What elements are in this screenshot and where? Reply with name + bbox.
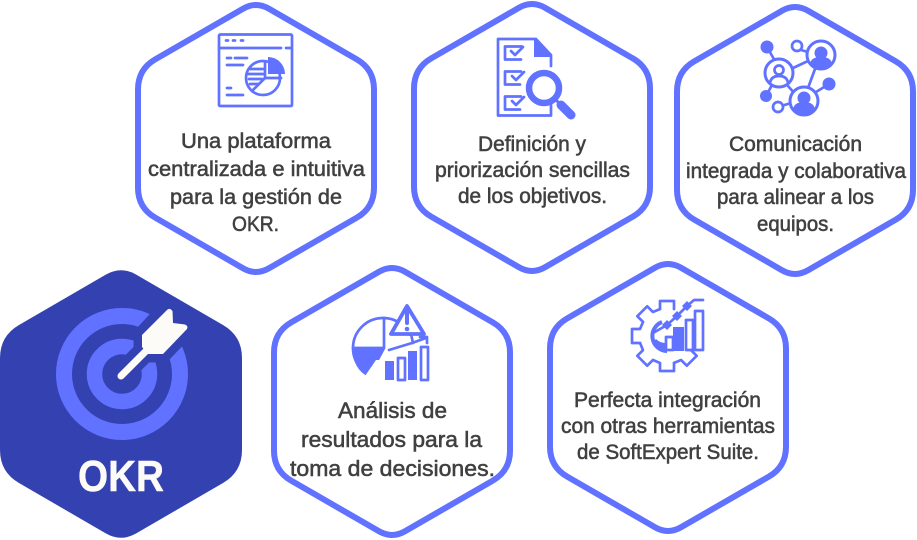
- icon: target with arrow: [64, 308, 188, 432]
- text: definición: priorización sencillas: [435, 158, 630, 182]
- hexagon outline 5: [550, 264, 786, 531]
- text: análisis: resultados para la: [301, 427, 482, 452]
- panel: plataforma centralizada: [138, 5, 374, 272]
- text: análisis: Análisis de: [338, 398, 447, 423]
- panel: análisis de resultados: [274, 268, 510, 535]
- text: comunicación: equipos.: [757, 212, 834, 236]
- panel: definición de objetivos: [414, 4, 650, 271]
- text: plataforma: Una plataforma: [181, 129, 331, 153]
- text: plataforma: [148, 129, 365, 236]
- panel: OKR badge: [0, 270, 242, 538]
- icon: checklist with magnifier: [498, 38, 571, 116]
- icon: pie chart, warning sign and bars: [352, 306, 428, 384]
- filled hexagon: [0, 270, 242, 538]
- text: análisis: toma de decisiones.: [290, 456, 495, 481]
- text: plataforma: centralizada e intuitiva: [148, 157, 365, 181]
- hexagon outline 1: [138, 5, 374, 272]
- text: plataforma: para la gestión de: [170, 185, 342, 209]
- hexagon outline 2: [414, 4, 650, 271]
- icon: dashboard window with pie chart: [219, 34, 292, 106]
- panel: integración: [550, 264, 786, 531]
- text: definición: de los objetivos.: [458, 184, 607, 208]
- text: integración: [561, 388, 775, 464]
- icon: connected people network: [760, 40, 836, 115]
- panel: comunicación integrada: [677, 7, 913, 274]
- text: plataforma: OKR.: [232, 212, 279, 236]
- text: comunicación: para alinear a los: [717, 185, 874, 209]
- text: comunicación: integrada y colaborativa: [686, 159, 906, 183]
- text: definición: Definición y: [478, 132, 586, 156]
- title: OKR: OKR: [78, 452, 164, 501]
- hexagon outline 4: [274, 268, 510, 535]
- text: análisis: [290, 398, 495, 481]
- text: definición: [435, 132, 630, 208]
- text: integración: Perfecta integración: [574, 388, 761, 412]
- text: integración: de SoftExpert Suite.: [577, 440, 759, 464]
- text: comunicación: Comunicación: [729, 132, 862, 156]
- icon: gear with growth chart: [632, 300, 703, 371]
- hexagon outline 3: [677, 7, 913, 274]
- text: comunicación: [686, 132, 906, 236]
- text: integración: con otras herramientas: [561, 414, 775, 438]
